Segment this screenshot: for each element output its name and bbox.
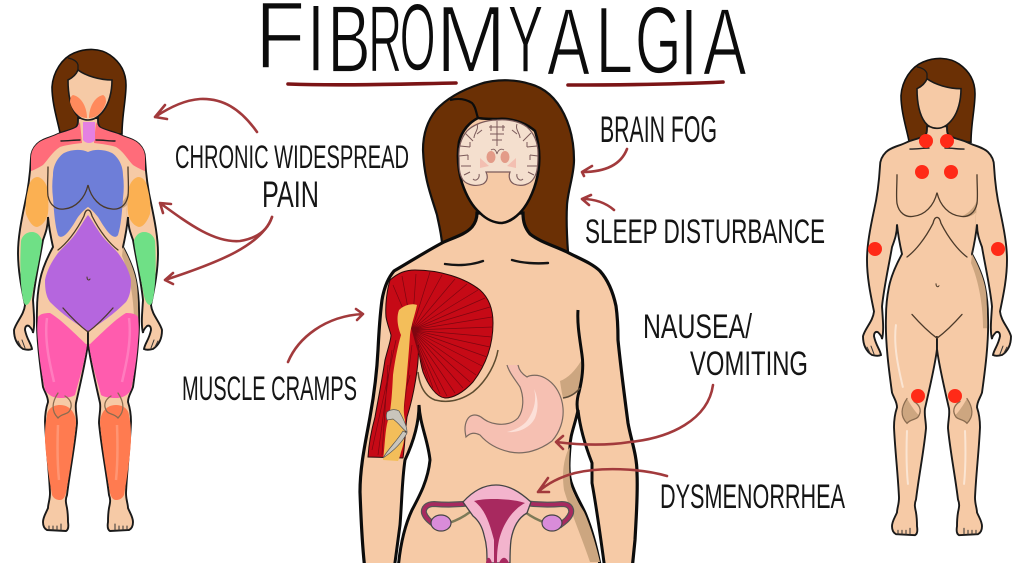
figure: central body <box>360 80 637 563</box>
thalamus <box>486 151 496 163</box>
breast contour <box>418 350 498 401</box>
label: nausea vomiting: NAUSEA/ <box>643 308 752 346</box>
arrow: pain to forearm <box>165 217 272 284</box>
label: nausea vomiting: VOMITING <box>690 345 808 383</box>
ovaries <box>431 515 451 531</box>
face <box>458 118 539 223</box>
elbow tendon <box>383 410 407 458</box>
arrow: muscle cramps <box>288 309 363 362</box>
hair part <box>450 99 478 118</box>
label: chronic widespread pain: CHRONIC WIDESPREAD <box>175 139 409 175</box>
uterus body <box>463 485 531 563</box>
arrow: brain fog <box>582 149 627 176</box>
label: nausea vomiting <box>643 308 808 383</box>
figure: tender points (right body) <box>863 58 1011 535</box>
muscles <box>368 270 493 461</box>
label: chronic widespread pain <box>175 139 409 215</box>
torso shading <box>560 361 600 562</box>
muscle highlight <box>46 318 130 480</box>
stomach highlight <box>507 389 538 432</box>
arrow: nausea <box>556 385 713 449</box>
muscle fibres <box>372 272 493 455</box>
label: muscle cramps: MUSCLE CRAMPS <box>182 370 357 408</box>
ligaments <box>449 512 546 523</box>
tender point dots <box>868 134 1005 403</box>
white gap left <box>394 405 430 563</box>
hair <box>423 80 574 252</box>
breast line <box>563 388 580 398</box>
uterus <box>424 485 571 563</box>
arrow: sleep disturbance <box>582 195 614 210</box>
label: chronic widespread pain: PAIN <box>262 174 319 215</box>
title <box>255 0 747 96</box>
brain folds <box>459 121 538 180</box>
knee shading <box>902 399 972 423</box>
arrow: dysmenorrhea <box>538 469 667 492</box>
label: dysmenorrhea: DYSMENORRHEA <box>660 478 845 516</box>
label: brain fog: BRAIN FOG <box>600 109 717 150</box>
brain <box>459 120 538 185</box>
stomach <box>465 365 563 453</box>
neck region <box>83 122 95 143</box>
fallopian tubes <box>424 503 571 526</box>
pain regions colour map <box>20 95 156 500</box>
title underlines <box>288 82 723 85</box>
torso and arms <box>360 213 637 563</box>
label: sleep disturbance: SLEEP DISTURBANCE <box>585 213 825 251</box>
figure: pain regions (left body) <box>14 49 162 531</box>
white gap right <box>569 410 605 563</box>
arrow: pain to upper arm <box>160 203 272 241</box>
arrow: pain to neck <box>155 99 257 132</box>
collar lines <box>445 260 548 265</box>
humerus bone <box>383 304 417 461</box>
right arm line <box>577 310 583 412</box>
uterine cavity <box>474 499 525 563</box>
